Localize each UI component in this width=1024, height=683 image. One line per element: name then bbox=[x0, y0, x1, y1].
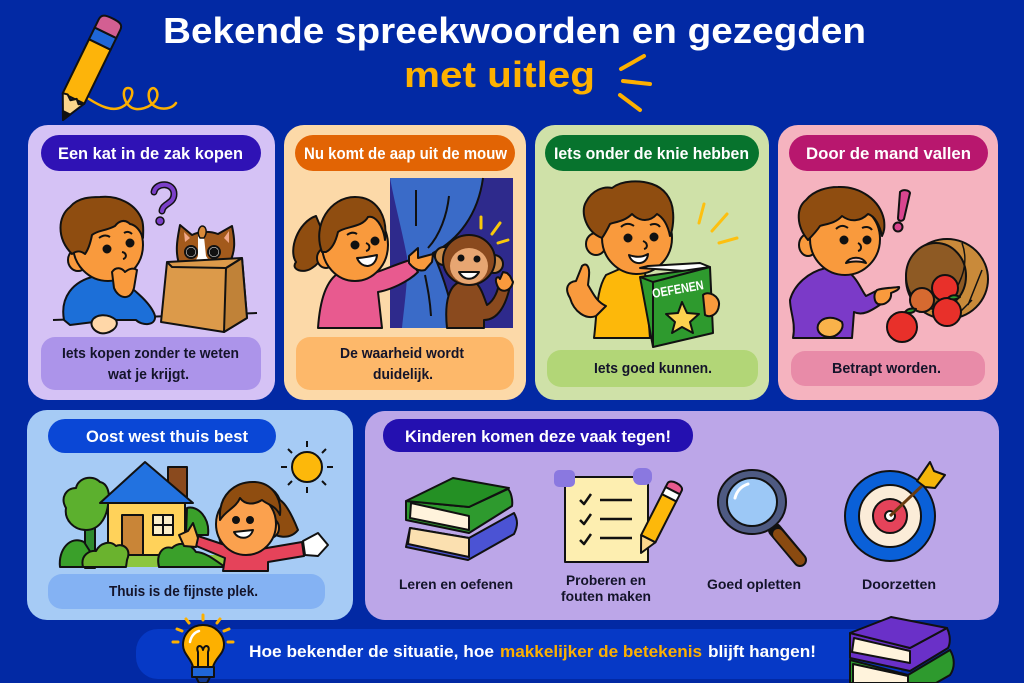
icon: light bulb bbox=[173, 615, 233, 683]
item: Leren en oefenen: Leren en oefenen bbox=[399, 576, 513, 592]
panel: Oost west thuis best bbox=[27, 410, 353, 620]
title bbox=[163, 10, 866, 95]
panel: Kinderen komen deze vaak tegen bbox=[365, 411, 999, 620]
title: Bekende spreekwoorden en gezegden bbox=[163, 10, 866, 51]
icon: magnifying glass bbox=[718, 470, 800, 560]
meaning: card 1: wat je krijgt. bbox=[107, 367, 189, 383]
icon: card 3 sparkle rays bbox=[699, 204, 737, 243]
illustration: boy caught with apples bbox=[790, 187, 988, 342]
item: Doorzetten: Doorzetten bbox=[862, 576, 936, 592]
item: Proberen en fouten maken: Proberen en bbox=[566, 572, 646, 588]
icon: exclamation mark bbox=[894, 190, 910, 232]
meaning: card 1 bbox=[41, 337, 261, 390]
meaning: card 4: Betrapt worden. bbox=[832, 361, 941, 377]
panel: Door de mand vallen bbox=[778, 125, 998, 400]
illustration: girl opening curtain with monkey bbox=[293, 178, 513, 328]
heading: card 2: Nu komt de aap uit de mouw bbox=[304, 144, 508, 163]
footer banner: makkelijker de betekenis bbox=[500, 642, 702, 661]
footer banner bbox=[136, 629, 906, 679]
item: Doorzetten bbox=[845, 462, 945, 592]
item: Proberen en fouten maken: fouten maken bbox=[561, 588, 651, 604]
panel: Nu komt de aap uit de mouw bbox=[284, 125, 526, 400]
meaning: card 2 bbox=[296, 337, 514, 390]
item: Goed opletten bbox=[707, 470, 801, 592]
icon: question mark bbox=[154, 185, 174, 225]
meaning: card 5: Thuis is de fijnste plek. bbox=[109, 584, 258, 600]
heading: card 6 bbox=[383, 419, 693, 452]
meaning: card 5 bbox=[48, 574, 325, 609]
panel: Een kat in de zak kopen bbox=[28, 125, 275, 400]
title: met uitleg bbox=[404, 54, 595, 95]
book label: OEFENEN bbox=[651, 277, 705, 301]
meaning: card 2: duidelijk. bbox=[373, 367, 433, 383]
heading: card 4: Door de mand vallen bbox=[806, 144, 971, 163]
heading: card 1 bbox=[41, 135, 261, 171]
illustration: boy with book bbox=[567, 181, 719, 347]
footer banner: blijft hangen! bbox=[708, 642, 816, 661]
footer banner: Hoe bekender de situatie, hoe bbox=[249, 642, 494, 661]
heading: card 3: Iets onder de knie hebben bbox=[554, 144, 749, 163]
icon: stack of books bbox=[406, 478, 517, 560]
icon: monkey sparkle rays bbox=[481, 217, 508, 243]
heading: card 5: Oost west thuis best bbox=[86, 427, 248, 446]
heading: card 5 bbox=[48, 419, 276, 453]
item: Proberen en fouten maken bbox=[554, 468, 684, 604]
icon: target with arrow bbox=[845, 462, 945, 561]
meaning: card 3: Iets goed kunnen. bbox=[594, 361, 712, 377]
icon: checklist with pencil bbox=[554, 468, 684, 562]
icon: sun bbox=[281, 441, 333, 493]
item: Goed opletten: Goed opletten bbox=[707, 576, 801, 592]
panel: Iets onder de knie hebben bbox=[535, 125, 769, 400]
meaning: card 1: Iets kopen zonder te weten bbox=[62, 346, 239, 362]
illustration: house, garden and girl bbox=[60, 462, 328, 571]
heading: card 2 bbox=[295, 135, 515, 171]
illustration: boy with cat in bag bbox=[53, 197, 257, 333]
heading: card 1: Een kat in de zak kopen bbox=[58, 144, 243, 163]
heading: card 6: Kinderen komen deze vaak tegen! bbox=[405, 427, 671, 446]
meaning: card 2: De waarheid wordt bbox=[340, 346, 464, 362]
icon: title rays bbox=[620, 56, 650, 110]
meaning: card 3 bbox=[547, 350, 758, 387]
heading: card 4 bbox=[789, 135, 988, 171]
icon: pencil with squiggle bbox=[52, 13, 176, 125]
item: Leren en oefenen bbox=[399, 478, 517, 592]
heading: card 3 bbox=[545, 135, 759, 171]
meaning: card 4 bbox=[791, 351, 985, 386]
icon: footer books bbox=[850, 617, 954, 683]
